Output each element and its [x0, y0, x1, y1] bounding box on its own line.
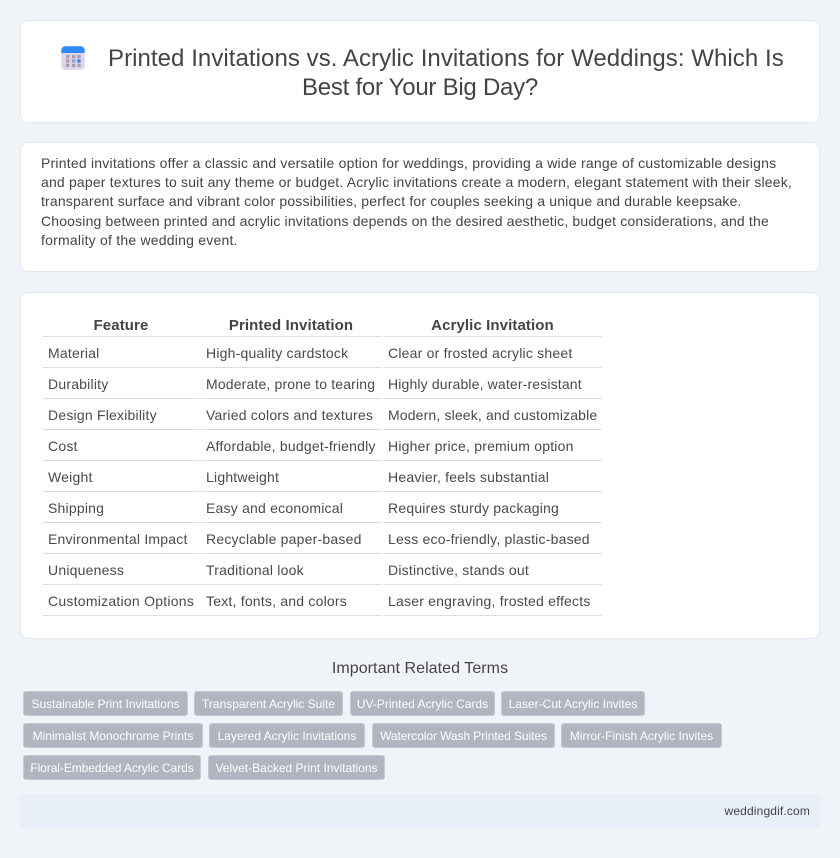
comparison table: Less eco-friendly, plastic-based	[388, 531, 590, 547]
comparison table: Distinctive, stands out	[388, 562, 529, 578]
comparison table: Higher price, premium option	[388, 438, 574, 454]
intro text: transparent surface and vibrant color possibilities, perfect for couples seeking a unique and durable keepsake.	[41, 193, 742, 209]
intro panel	[20, 142, 820, 272]
related term tags: Layered Acrylic Invitations	[218, 729, 356, 743]
title	[108, 45, 784, 101]
intro text	[41, 155, 792, 248]
comparison table: Cost	[48, 438, 78, 454]
comparison table: Moderate, prone to tearing	[206, 376, 375, 392]
comparison table: Highly durable, water-resistant	[388, 376, 582, 392]
comparison table: Modern, sleek, and customizable	[388, 407, 597, 423]
comparison table: Traditional look	[206, 562, 304, 578]
intro text: formality of the wedding event.	[41, 232, 238, 248]
comparison table: Acrylic Invitation	[431, 317, 554, 334]
table panel	[20, 292, 820, 639]
comparison table: High-quality cardstock	[206, 345, 348, 361]
related terms heading: Important Related Terms	[332, 660, 508, 677]
title: Best for Your Big Day?	[302, 74, 538, 101]
comparison table: Printed Invitation	[229, 317, 353, 334]
comparison table: Easy and economical	[206, 500, 343, 516]
comparison table: Feature	[94, 317, 148, 334]
comparison table: Text, fonts, and colors	[206, 593, 347, 609]
comparison table: Requires sturdy packaging	[388, 500, 559, 516]
comparison table: Durability	[48, 376, 108, 392]
intro text: Choosing between printed and acrylic invitations depends on the desired aesthetic, budget considerations, and the	[41, 213, 769, 229]
comparison table: Heavier, feels substantial	[388, 469, 549, 485]
footer source: weddingdif.com	[725, 804, 810, 818]
comparison table: Customization Options	[48, 593, 194, 609]
comparison table: Weight	[48, 469, 93, 485]
comparison table: Design Flexibility	[48, 407, 157, 423]
intro text: and paper textures to suit any theme or budget. Acrylic invitations create a modern, elegant statement with their sleek,	[41, 174, 792, 190]
related term tags: Transparent Acrylic Suite	[202, 697, 335, 711]
intro text: Printed invitations offer a classic and versatile option for weddings, providing a wide range of customizable designs	[41, 155, 776, 171]
comparison table: Material	[48, 345, 99, 361]
related term tags: Velvet-Backed Print Invitations	[215, 761, 378, 775]
comparison table: Environmental Impact	[48, 531, 188, 547]
related term tags: Watercolor Wash Printed Suites	[380, 729, 547, 743]
comparison table	[43, 317, 602, 616]
related term tags	[23, 691, 722, 780]
comparison table: Laser engraving, frosted effects	[388, 593, 591, 609]
related term tags: Floral-Embedded Acrylic Cards	[30, 761, 194, 775]
comparison table: Lightweight	[206, 469, 279, 485]
comparison table: Varied colors and textures	[206, 407, 373, 423]
header panel	[20, 20, 820, 123]
icon: calendar	[61, 46, 85, 70]
comparison table: Clear or frosted acrylic sheet	[388, 345, 572, 361]
related term tags: Laser-Cut Acrylic Invites	[509, 697, 637, 711]
comparison table: Affordable, budget-friendly	[206, 438, 376, 454]
related term tags: Mirror-Finish Acrylic Invites	[570, 729, 713, 743]
comparison table: Recyclable paper-based	[206, 531, 362, 547]
title: Printed Invitations vs. Acrylic Invitations for Weddings: Which Is	[108, 45, 784, 72]
related term tags: Minimalist Monochrome Prints	[33, 729, 193, 743]
comparison table: Uniqueness	[48, 562, 124, 578]
related term tags: UV-Printed Acrylic Cards	[357, 697, 488, 711]
comparison table: Shipping	[48, 500, 104, 516]
related term tags: Sustainable Print Invitations	[31, 697, 180, 711]
footer bar	[20, 794, 820, 828]
